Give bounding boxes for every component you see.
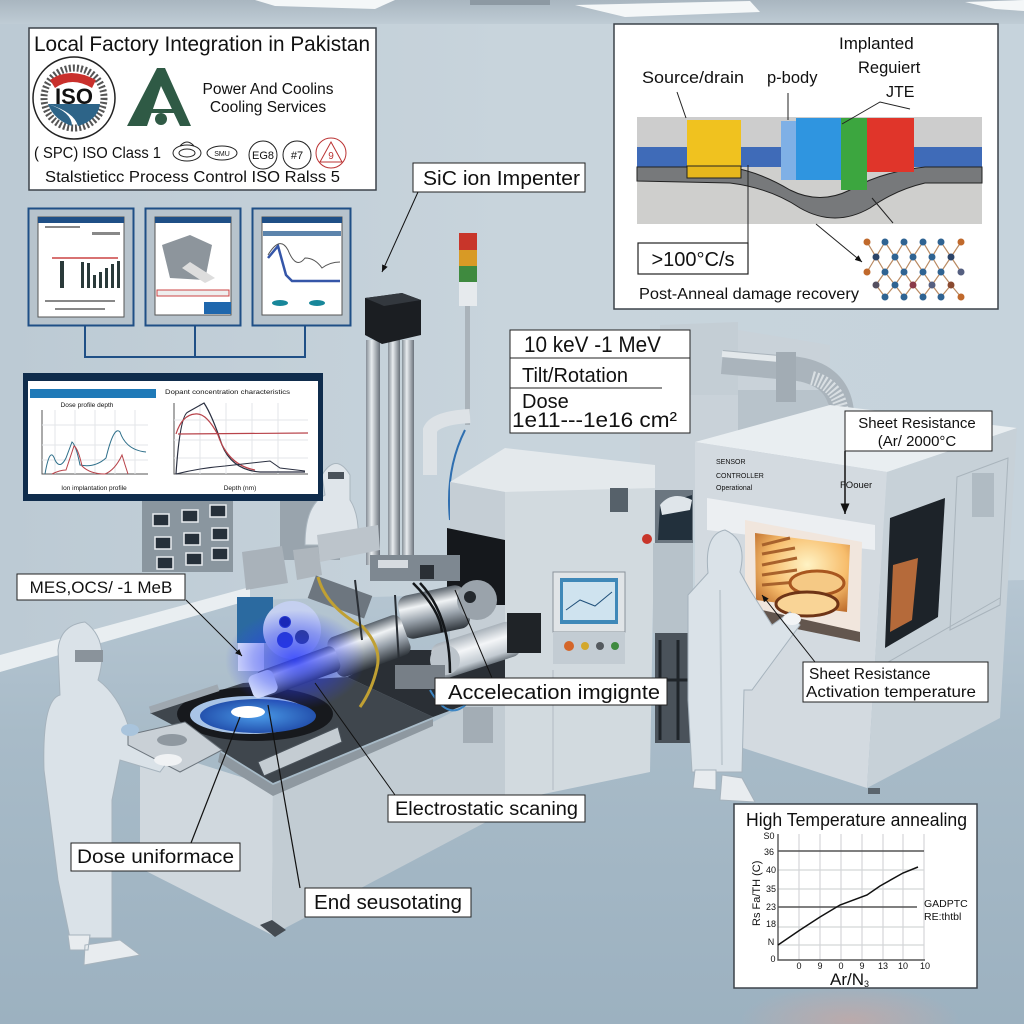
implant blocks (687, 118, 914, 190)
certification icons: 9 (328, 151, 334, 162)
central cabinet (450, 448, 655, 802)
right chart: Depth (nm) (224, 485, 256, 492)
left chart: Dose profile depth (61, 402, 114, 409)
ramp rate box: >100°C/s (651, 249, 735, 271)
dark equipment bay (642, 490, 693, 743)
callout: beam parameters: Tilt/Rotation (522, 365, 628, 387)
axis numbers: 10 (898, 961, 908, 971)
axes and reference lines (778, 834, 925, 960)
ramp rate box (638, 243, 748, 274)
labels: p-body (767, 69, 818, 87)
furnace label plate: Operational (716, 485, 753, 492)
axis numbers: 18 (766, 919, 776, 929)
beamline machinery (225, 525, 541, 717)
panel: device cross-section (614, 24, 998, 309)
left chart: Ion implantation profile (61, 485, 127, 492)
worker at end station (44, 622, 222, 965)
callout: end station rotating: End seusotating (314, 892, 462, 914)
small screen: equipment view (146, 208, 240, 326)
furnace side window (885, 498, 945, 648)
axis numbers: 23 (766, 902, 776, 912)
certification icons: EG8 (252, 150, 274, 162)
worker at furnace (688, 530, 801, 802)
right chart: Dopant concentration characteristics (165, 389, 291, 396)
furnace (695, 405, 1017, 794)
furnace door band (707, 498, 875, 550)
post-anneal text: Post-Anneal damage recovery (639, 286, 859, 303)
axis numbers (763, 831, 930, 971)
panel: high temperature annealing chart (734, 804, 977, 989)
grid (778, 834, 924, 960)
crystal lattice (864, 238, 964, 300)
implanter tower (365, 293, 470, 565)
curve (778, 867, 918, 945)
services text: Power And Coolins (203, 81, 334, 98)
background: floor (0, 580, 1024, 1024)
side label (924, 898, 968, 923)
SPC ISO class text: ( SPC) ISO Class 1 (34, 145, 161, 162)
axis numbers: 40 (766, 865, 776, 875)
leader lines (677, 92, 910, 262)
implanter table (140, 677, 505, 937)
callout: sheet resistance activation: Sheet Resistance (809, 666, 930, 683)
oven opening (745, 520, 862, 642)
icon: ISO seal: ISO (55, 84, 93, 109)
callout: dose uniformity: Dose uniformace (77, 847, 234, 868)
axis numbers: 0 (770, 954, 776, 964)
axis numbers: 10 (920, 961, 930, 971)
x axis label: 3 (864, 979, 869, 989)
axis numbers: 13 (878, 961, 888, 971)
small screen: bar chart (28, 208, 134, 326)
callout: beam parameters (510, 330, 690, 433)
certification icons (173, 138, 346, 169)
back machine (280, 322, 830, 560)
panel title: Local Factory Integration in Pakistan (34, 33, 370, 56)
icon: green triangular logo (127, 68, 191, 126)
callout: sheet resistance top (845, 411, 992, 514)
keypad wall panel (142, 500, 233, 572)
callout: MES OCS: MES,OCS/ -1 MeB (30, 578, 172, 597)
axis numbers: 9 (817, 961, 823, 971)
panel: local factory integration (29, 28, 376, 190)
axis numbers: 9 (859, 961, 865, 971)
callout: SiC ion implanter (382, 163, 585, 272)
furnace label plate: FOouer (840, 480, 872, 491)
callout: beam parameters: 10 keV -1 MeV (524, 332, 661, 357)
chart title: High Temperature annealing (746, 809, 967, 830)
background: ceiling with lights (0, 0, 1024, 24)
axis numbers: N (768, 937, 774, 947)
right chart (165, 389, 308, 492)
callout: electrostatic scanning (315, 683, 585, 822)
labels: Reguiert (858, 59, 921, 77)
furnace label plate: CONTROLLER (716, 473, 764, 480)
certification icons: #7 (291, 150, 303, 162)
wafer end station (149, 684, 342, 776)
statistical process control text: Stalstieticc Process Control ISO Ralss 5 (45, 169, 340, 186)
callout: dose uniformity (71, 717, 240, 871)
wafer layers (637, 117, 982, 224)
callout: beam parameters: Dose (522, 391, 569, 413)
callout: end station rotating (268, 705, 471, 917)
furnace label plate (716, 459, 872, 492)
axis numbers: 35 (766, 884, 776, 894)
small screen: line chart (252, 208, 350, 326)
callout: sheet resistance top: Sheet Resistance (858, 415, 976, 432)
axis numbers: 36 (764, 847, 774, 857)
connector lines (85, 326, 305, 357)
callout: sheet resistance activation: Activation temperature (806, 684, 976, 701)
callout: beam parameters: 1e11---1e16 cm² (512, 409, 677, 432)
callout: sheet resistance top: (Ar/ 2000°C (878, 433, 956, 450)
axis numbers: 0 (838, 961, 844, 971)
axis numbers: 0 (796, 961, 802, 971)
axis numbers: S0 (763, 831, 775, 841)
labels: Implanted (839, 34, 914, 53)
callout: MES OCS (17, 574, 242, 656)
icon: ISO seal (33, 57, 115, 139)
side label: RE:thtbl (924, 911, 961, 923)
callout: acceleration: Accelecation imgignte (448, 682, 660, 704)
callout: sheet resistance activation (762, 595, 988, 702)
left chart (30, 389, 156, 492)
furnace label plate: SENSOR (716, 459, 746, 466)
labels: JTE (886, 84, 914, 101)
labels (642, 34, 921, 101)
side label: GADPTC (924, 898, 968, 910)
worker behind machine (305, 464, 358, 545)
x axis label: Ar/N (830, 970, 864, 989)
services text: Cooling Services (210, 99, 326, 116)
labels: Source/drain (642, 69, 744, 87)
certification icons: SMU (214, 151, 230, 158)
services text (203, 81, 334, 116)
callout: acceleration (435, 590, 667, 705)
main monitor (23, 373, 323, 501)
y axis label: Rs Fa/TH (C) (751, 861, 763, 926)
exhaust duct (722, 352, 842, 412)
callout: SiC ion implanter: SiC ion Impenter (423, 168, 580, 190)
stack light (459, 233, 477, 425)
callout: electrostatic scanning: Electrostatic scaning (395, 799, 578, 820)
